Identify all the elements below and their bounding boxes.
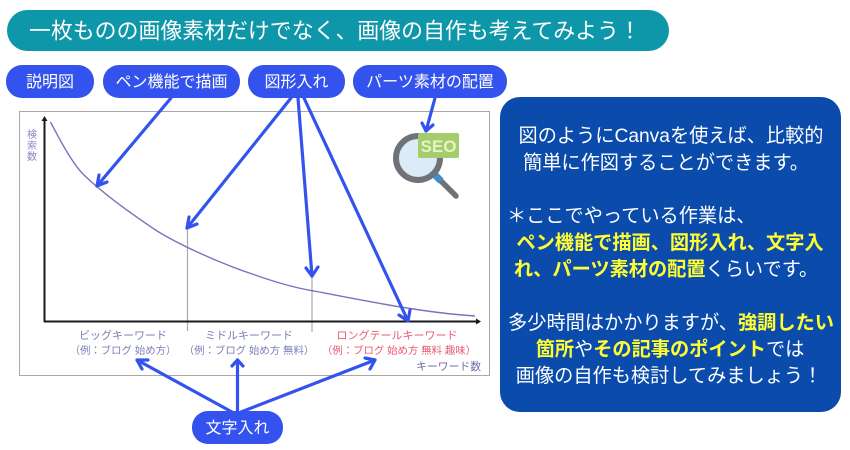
label: middle keyword: ミドルキーワード (205, 330, 293, 342)
label: big keyword: ビッグキーワード (79, 328, 167, 342)
paragraph: tasks: れ、パーツ素材の配置くらいです。 (514, 258, 818, 280)
paragraph: advice: 箇所やその記事のポイントでは (536, 338, 804, 360)
arrow: shape to axis (304, 98, 410, 321)
paragraph: advice: 多少時間はかかりますが、強調したい (508, 312, 834, 334)
y axis label: 数 (27, 150, 37, 163)
paragraph: tasks: ペン機能で描画、図形入れ、文字入 (516, 232, 824, 254)
tag: 文字入れ: 文字入れ (205, 419, 270, 437)
label: big keyword: （例：ブログ 始め方） (70, 344, 176, 357)
chart axes (42, 116, 481, 324)
title banner: 一枚ものの画像素材だけでなく、画像の自作も考えてみよう！ (29, 18, 641, 44)
arrow: shape to left divider (187, 98, 291, 228)
tag: パーツ素材の配置 (353, 65, 507, 98)
tag: 図形入れ: 図形入れ (264, 73, 329, 91)
tag: 説明図 (6, 65, 94, 98)
icon: SEO magnifier (396, 133, 459, 196)
y axis label: 検 (27, 128, 37, 141)
panel: explanation (500, 97, 841, 412)
label: long tail keyword (322, 328, 476, 357)
arrow: parts to icon (422, 98, 435, 131)
tag: ペン機能で描画: ペン機能で描画 (115, 73, 228, 91)
paragraph: advice (508, 312, 834, 387)
label: middle keyword (184, 330, 314, 357)
arrow: text to middle keyword (232, 360, 243, 412)
title banner (7, 10, 669, 51)
paragraph: tasks: ＊ここでやっている作業は、 (507, 205, 755, 227)
tag: パーツ素材の配置: パーツ素材の配置 (366, 73, 494, 91)
paragraph: intro (519, 125, 823, 174)
panel: chart (20, 112, 490, 376)
icon: SEO magnifier: SEO (421, 137, 456, 156)
paragraph: intro: 簡単に作図することができます。 (523, 152, 809, 174)
label: big keyword (70, 328, 176, 357)
tag: 文字入れ (192, 411, 283, 444)
paragraph: intro: 図のようにCanvaを使えば、比較的 (519, 125, 823, 147)
x axis label: キーワード数 (416, 360, 481, 373)
label: long tail keyword: ロングテールキーワード (336, 328, 458, 342)
paragraph: tasks (507, 205, 824, 280)
arrow: text to long tail keyword (241, 358, 375, 412)
tag: ペン機能で描画 (103, 65, 240, 98)
arrow: pen to curve (97, 98, 171, 186)
arrow: shape to right divider (298, 98, 318, 276)
label: middle keyword: （例：ブログ 始め方 無料） (184, 344, 314, 357)
y axis label (27, 128, 37, 163)
chart dividers (188, 226, 312, 332)
paragraph: advice: 画像の自作も検討してみましょう！ (516, 365, 822, 387)
tag: 説明図: 説明図 (26, 73, 74, 91)
tag: 図形入れ (248, 65, 345, 98)
arrow: text to big keyword (137, 360, 232, 412)
label: long tail keyword: （例：ブログ 始め方 無料 趣味） (322, 344, 476, 357)
y axis label: 索 (27, 139, 37, 152)
demand curve (50, 122, 475, 316)
